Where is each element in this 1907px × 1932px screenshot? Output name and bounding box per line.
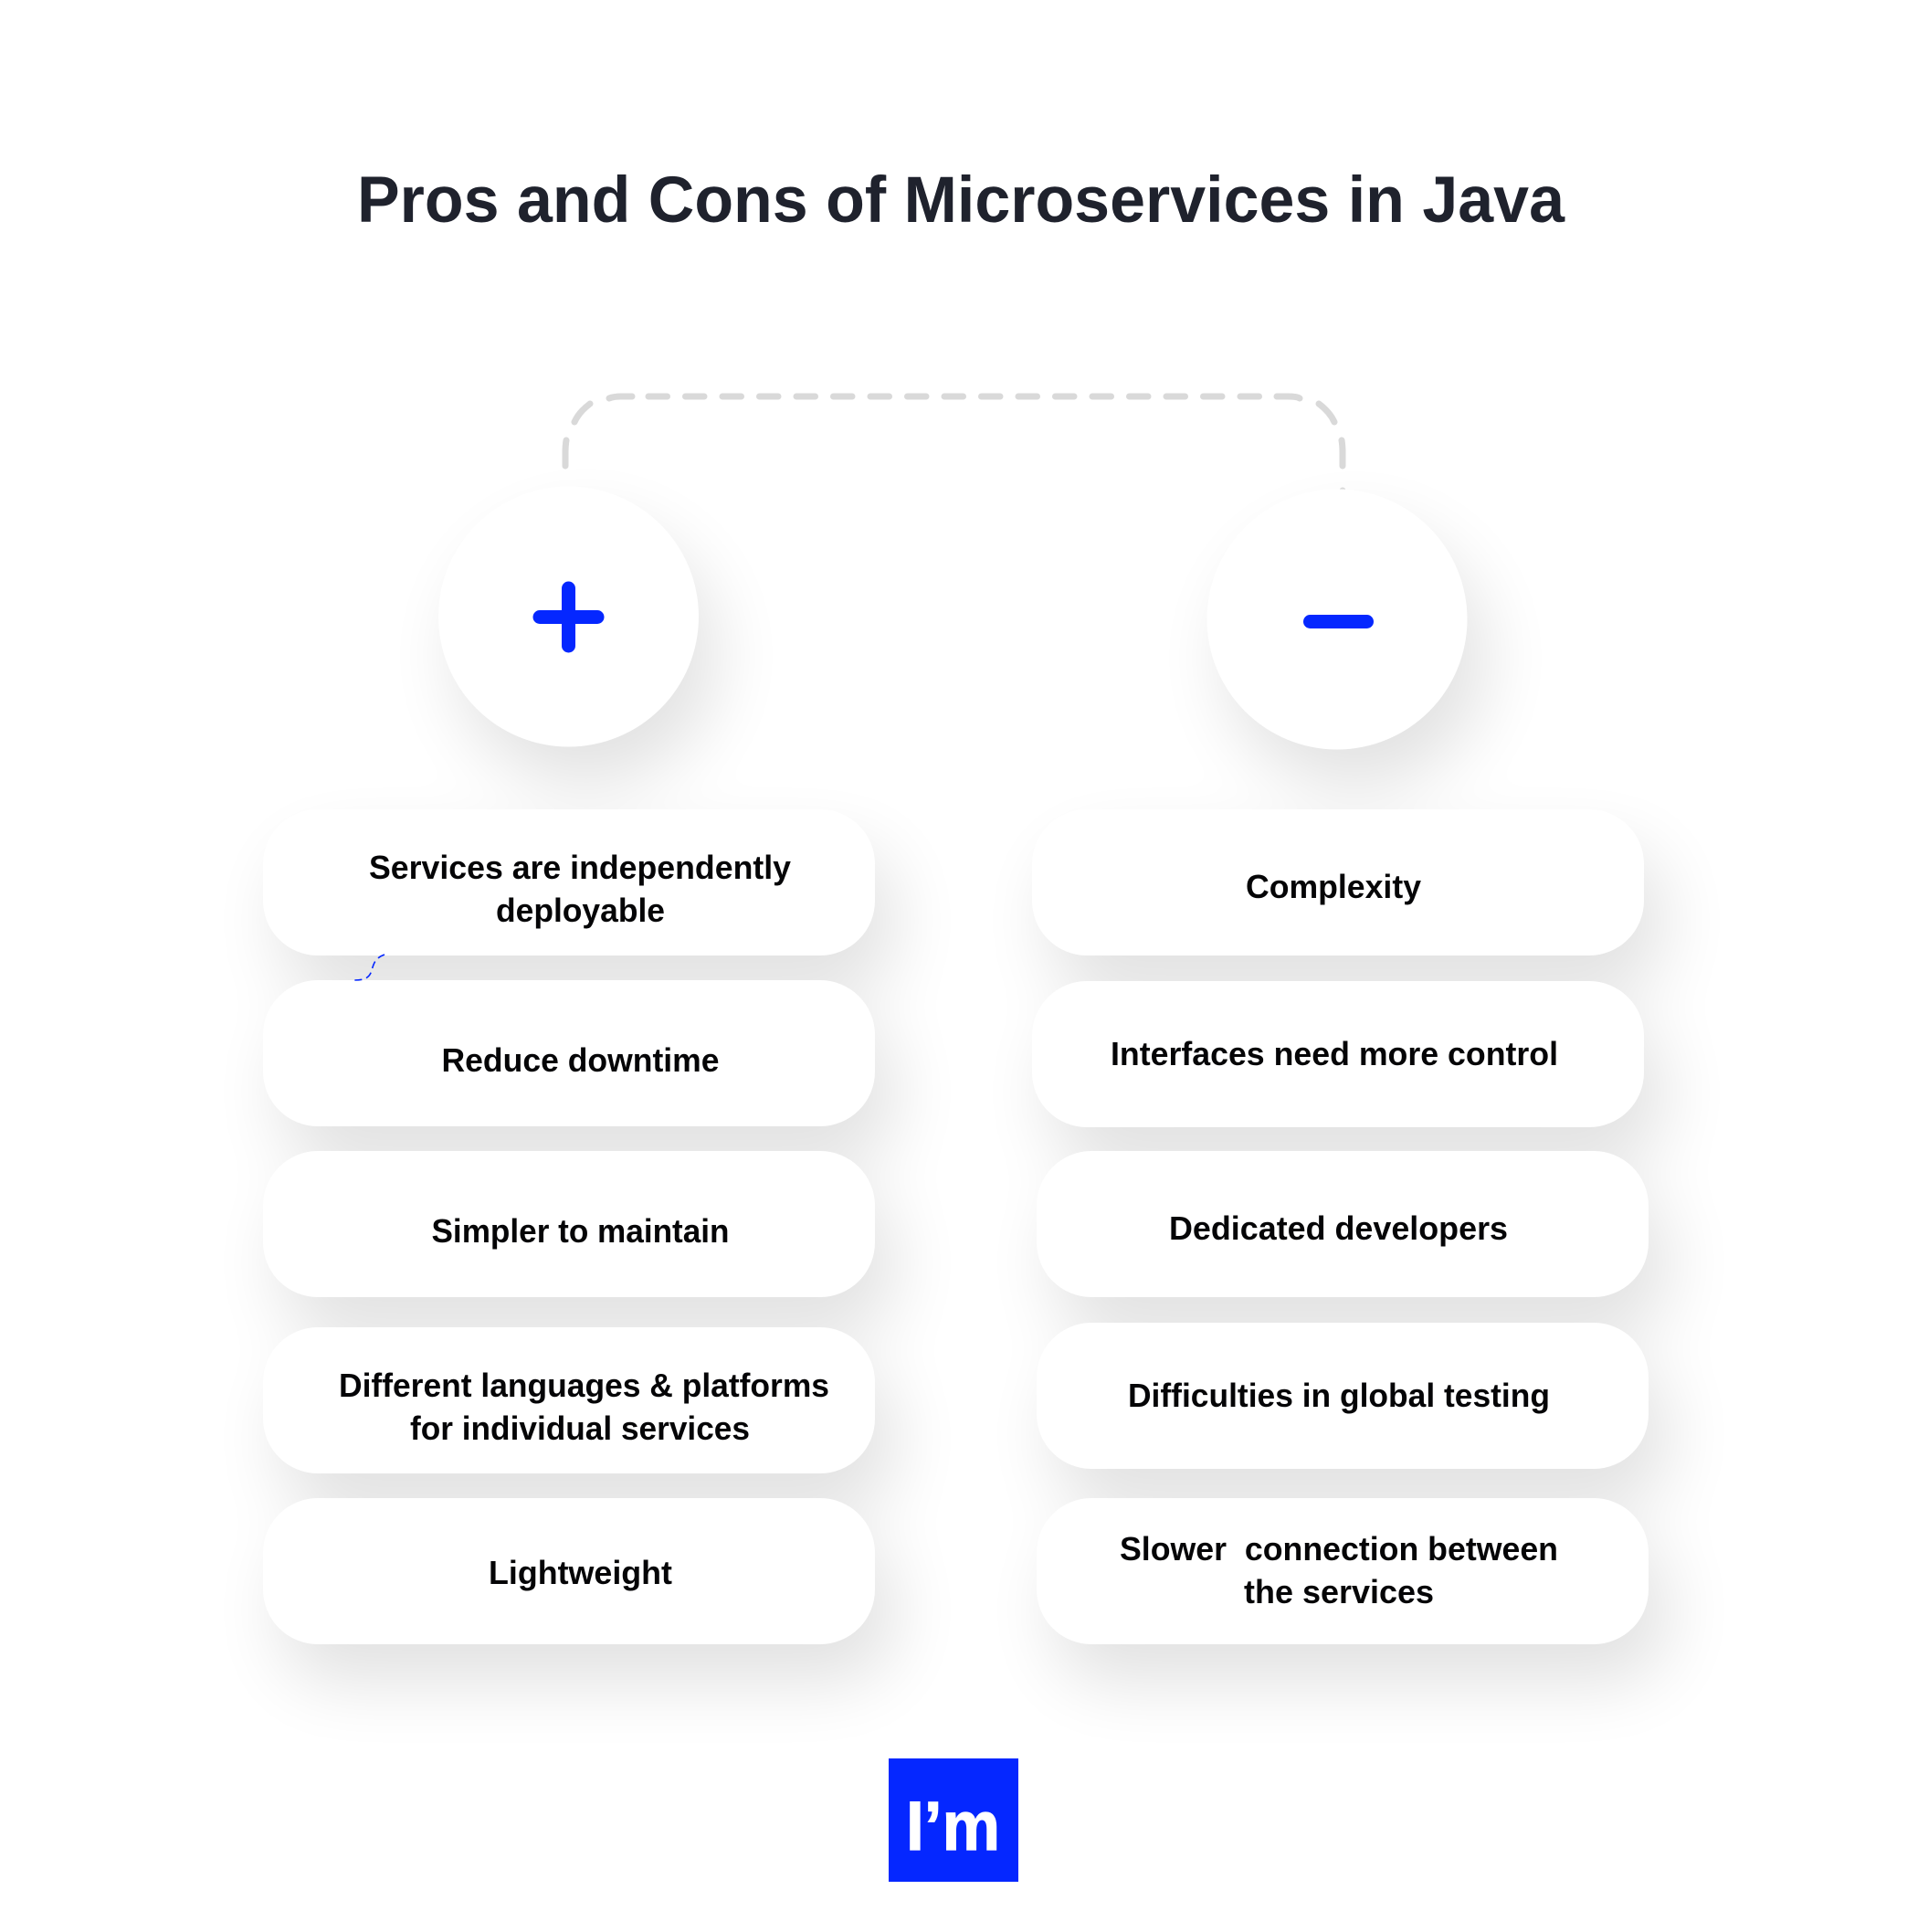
pro card: independently deployable: deployable	[496, 892, 665, 929]
con card: slower connection: the services	[1244, 1573, 1434, 1610]
panel: cons list	[1032, 809, 1649, 1644]
pro card: independently deployable: Services are independently	[369, 849, 791, 886]
con card: difficulties in global testing: Difficulties in global testing	[1128, 1377, 1550, 1414]
con card: difficulties in global testing	[1037, 1323, 1649, 1469]
pro card: different languages and platforms: for individual services	[410, 1409, 750, 1447]
pro card: independently deployable	[263, 809, 875, 955]
pro card: lightweight: Lightweight	[489, 1554, 672, 1591]
pro card: reduce downtime: Reduce downtime	[442, 1041, 720, 1079]
icon: minus	[1303, 615, 1374, 628]
blue dashed squiggle	[354, 955, 385, 980]
con card: complexity	[1032, 809, 1644, 955]
title: Pros and Cons of Microservices in Java	[357, 164, 1565, 237]
logo: I’m	[906, 1788, 1000, 1865]
dashed connector between plus and minus	[565, 396, 1343, 491]
pro card: different languages and platforms: Different languages & platforms	[339, 1367, 829, 1404]
logo	[889, 1758, 1018, 1882]
pro card: reduce downtime	[263, 980, 875, 1126]
plus circle	[438, 486, 699, 747]
pro card: different languages and platforms	[263, 1327, 875, 1473]
con card: slower connection	[1037, 1498, 1649, 1644]
con card: interfaces need more control: Interfaces need more control	[1111, 1035, 1558, 1072]
pro card: simpler to maintain: Simpler to maintain	[431, 1212, 729, 1250]
icon: plus	[540, 588, 597, 646]
con card: dedicated developers	[1037, 1151, 1649, 1297]
minus circle	[1207, 490, 1467, 749]
con card: interfaces need more control	[1032, 981, 1644, 1127]
con card: slower connection: Slower connection between	[1120, 1530, 1558, 1568]
pro card: simpler to maintain	[263, 1151, 875, 1297]
con card: dedicated developers: Dedicated developers	[1169, 1209, 1508, 1247]
pro card: lightweight	[263, 1498, 875, 1644]
con card: complexity: Complexity	[1246, 868, 1421, 905]
panel: pros list	[263, 809, 875, 1644]
